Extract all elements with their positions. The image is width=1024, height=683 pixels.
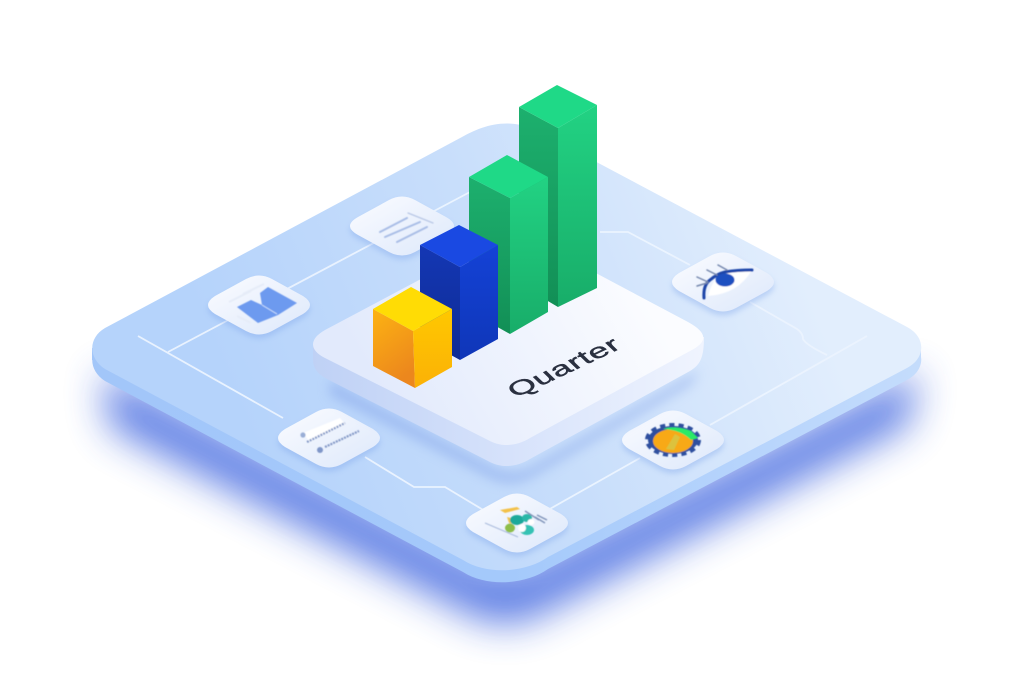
bar: medium green bbox=[469, 155, 548, 334]
card: chart illustration bbox=[466, 494, 568, 556]
icon: text lines bbox=[380, 213, 433, 242]
platform base bbox=[92, 123, 921, 582]
icon: list rows bbox=[300, 418, 359, 453]
icon: sun with rays bbox=[648, 426, 698, 454]
card: folder chart bbox=[208, 276, 310, 338]
connector lines bbox=[138, 192, 867, 514]
bar: blue bbox=[420, 225, 498, 360]
icon: eye bbox=[697, 265, 752, 298]
label: Quarter: Quarter bbox=[501, 333, 627, 402]
bar chart bbox=[373, 85, 597, 388]
platform shadow bbox=[104, 372, 918, 623]
icon: blue folder bbox=[229, 284, 297, 323]
bar: tall green bbox=[519, 85, 597, 307]
card: eye bbox=[672, 252, 774, 316]
tile side bbox=[313, 337, 704, 466]
icon: colourful mini chart bbox=[485, 507, 547, 537]
card: document bbox=[350, 196, 454, 260]
tile top surface bbox=[313, 234, 703, 445]
platform top surface bbox=[92, 123, 921, 570]
card: sun gauge bbox=[622, 410, 724, 474]
center tile bbox=[313, 234, 704, 466]
card: list bbox=[278, 408, 380, 472]
platform side edge bbox=[92, 135, 921, 582]
center tile shadow bbox=[330, 370, 700, 483]
bar: yellow bbox=[373, 287, 452, 388]
